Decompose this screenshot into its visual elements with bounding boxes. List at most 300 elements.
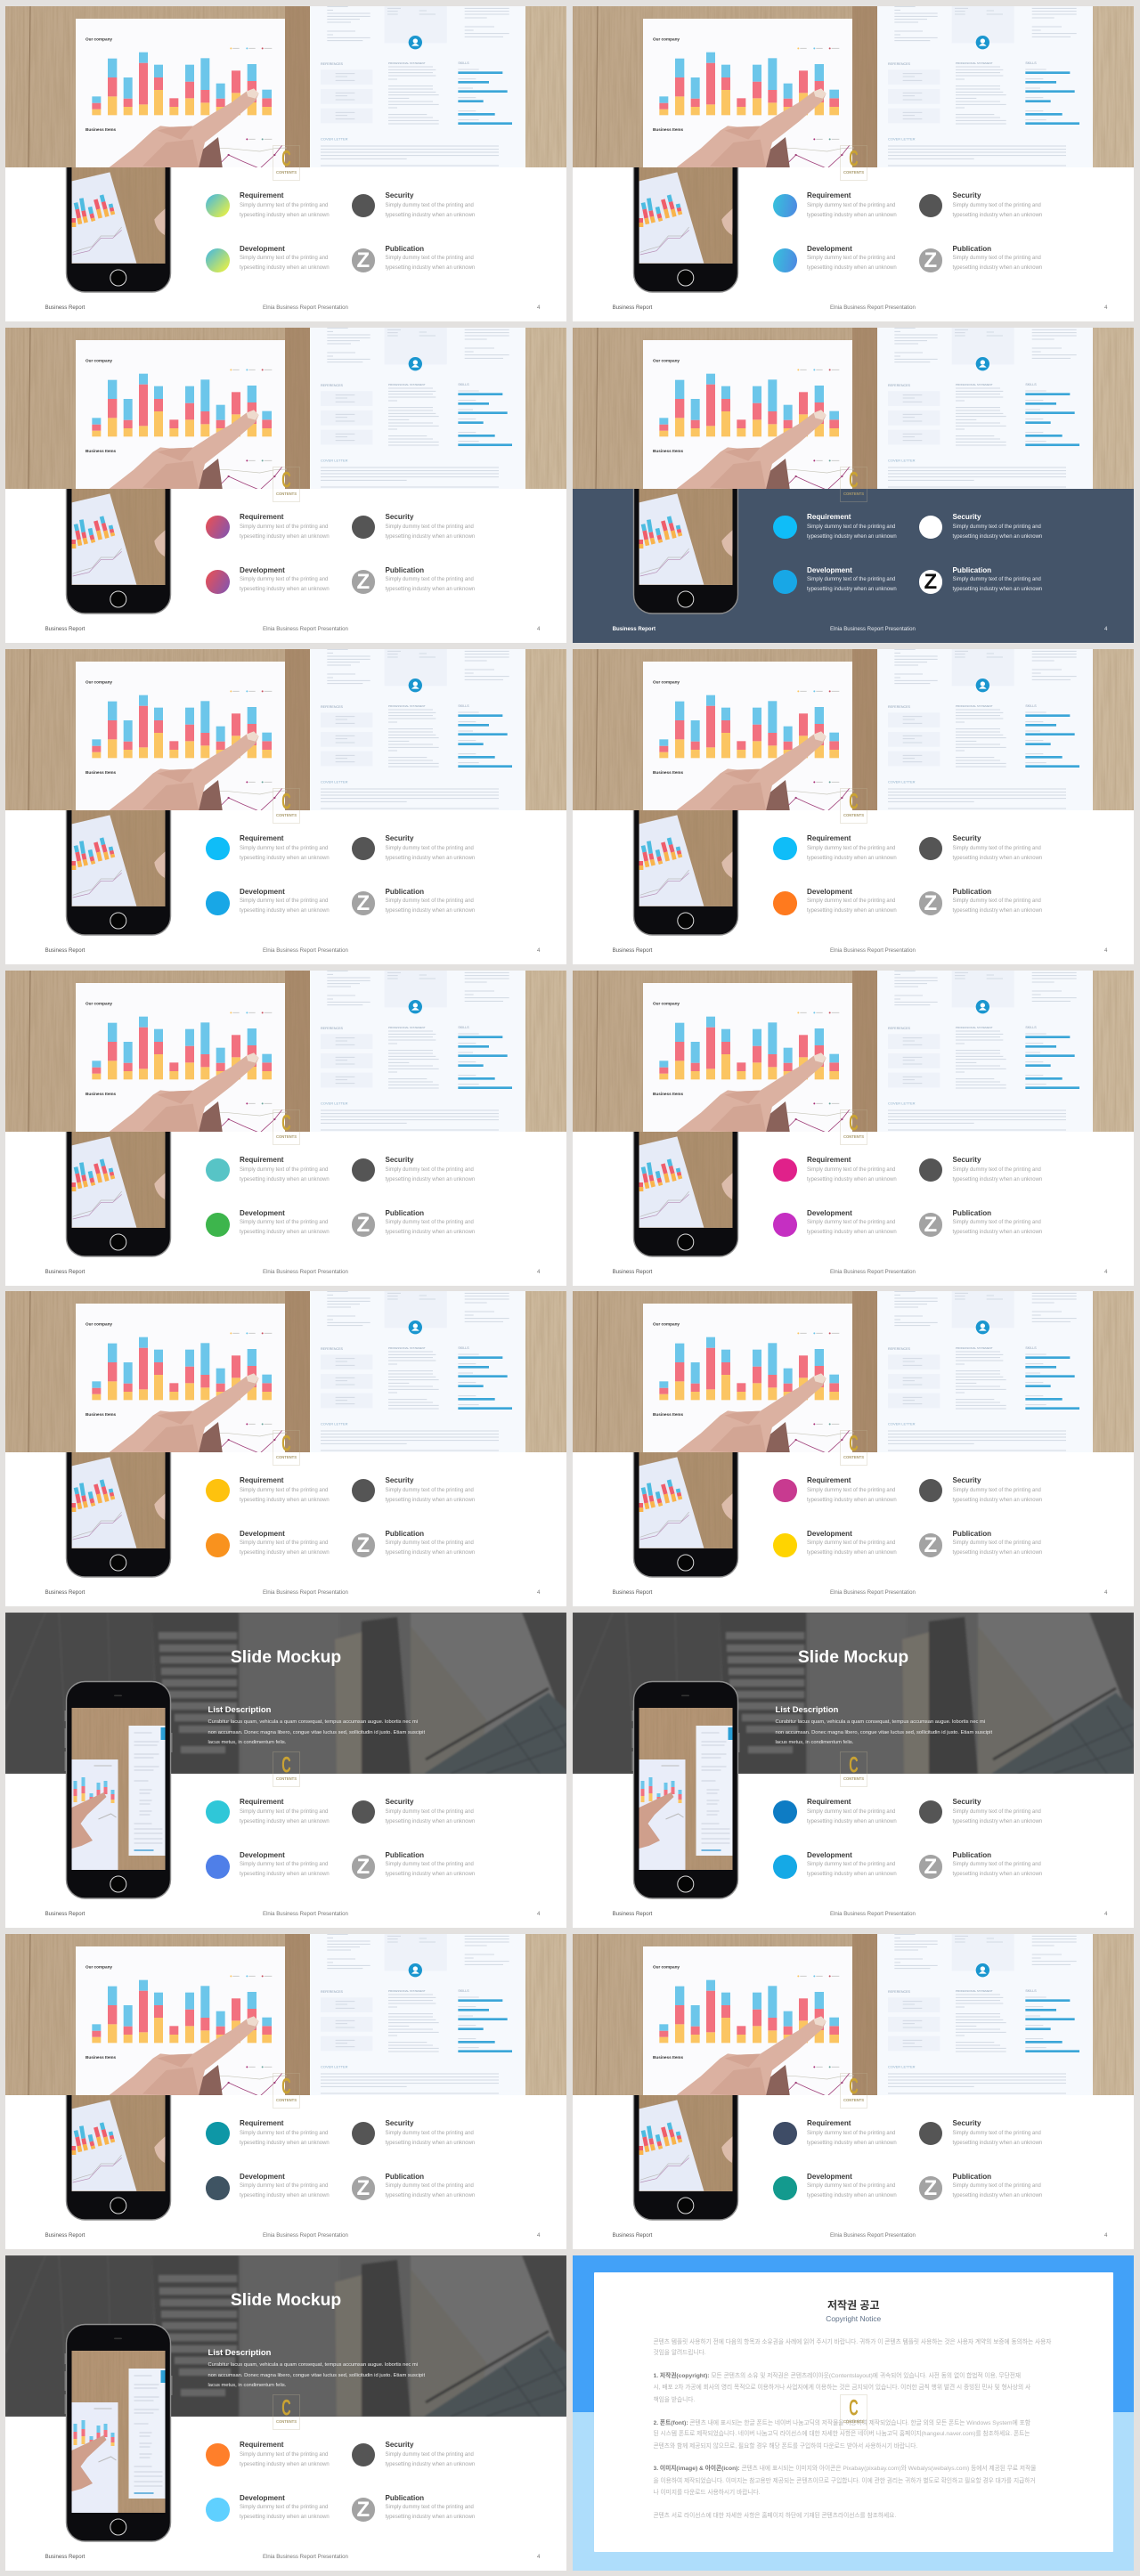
feature: security [919,1155,1071,1195]
footer: Elnia Business Report Presentation [263,626,348,632]
feature: security: typesetting industry when an unknown [953,1819,1042,1824]
text block: notice body: 3. 이미지(image) & 아이콘(icon): 콘텐츠 내에 표시되는 이미지와 아이콘은 Pixabay(pixabay.com)와 Webalys(webalys.com) 등에서 제공된 무료 저작물 [654,2466,1036,2472]
feature: publication: Z [356,2498,370,2522]
feature: security [351,1155,502,1195]
footer: Business Report [45,947,85,954]
logo watermark [840,467,867,502]
feature: development: Development [807,1530,852,1538]
feature: development: Development [807,566,852,574]
feature: requirement [773,512,924,552]
phone mockup [573,971,1134,1286]
footer: 4 [1104,626,1107,632]
feature: requirement [206,1475,357,1516]
slide 15: slide mockup, orange and sky [5,2255,566,2571]
feature: development: Simply dummy text of the printing and [807,2183,895,2189]
feature: publication: Z [924,570,937,594]
feature: requirement: typesetting industry when an unknown [240,1498,330,1503]
feature: requirement [206,191,330,218]
feature: development: Simply dummy text of the printing and [240,1540,328,1546]
description text [208,2361,425,2392]
feature: development: Simply dummy text of the printing and [240,1220,328,1225]
feature: requirement: typesetting industry when an unknown [807,856,897,861]
feature: security [919,1475,1071,1516]
band photo: charts and resume on wood [5,971,566,1132]
description text: lacus metus, in condimentum felis. [208,1740,286,1745]
subheading: list description: List Description [775,1704,838,1714]
feature: requirement: typesetting industry when an unknown [240,2141,330,2146]
slide 4: dark navy variant [573,328,1134,643]
logo watermark: CONTENTS [843,813,864,817]
feature: publication [919,2172,1071,2212]
feature: security [351,1797,502,1837]
footer: Business Report [45,1269,85,1275]
feature: security [352,513,475,540]
logo watermark: CONTENTS [276,492,297,496]
feature: security: Simply dummy text of the printing and [953,2130,1041,2135]
feature: requirement: typesetting industry when an unknown [807,1819,897,1824]
feature: requirement: Simply dummy text of the printing and [240,2130,328,2135]
band photo: city buildings [573,1613,1134,1774]
logo watermark: CONTENTS [843,1455,864,1459]
feature: publication: typesetting industry when an unknown [953,1230,1042,1235]
text block: notice body: 2. 폰트(font): 콘텐츠 내에 표시되는 한글 폰트는 네이버 나눔고딕의 저작물을 이용하여 제작되었습니다. 한글 외의 모든 폰트는 Windows System에 포함 [654,2420,1030,2426]
feature: requirement [206,833,357,874]
footer [573,1909,1134,1920]
logo watermark: CONTENTS [843,170,864,175]
feature: requirement: Simply dummy text of the printing and [807,1809,895,1815]
feature: publication [919,1850,1071,1890]
text block: notice body: 1. 저작권(copyright): 모든 콘텐츠의 소유 및 저작권은 콘텐츠레이아웃(Contentslayout)에 귀속되어 있습니다. 사전 동의 없이 합법적 이용, 무단전재 [654,2373,1021,2379]
band photo: charts and resume on wood [5,1934,566,2095]
feature: development: Simply dummy text of the printing and [807,577,895,582]
subheading: list description: List Description [208,1704,271,1714]
phone mockup [5,1934,566,2249]
feature: publication: Publication [953,566,991,574]
band photo: city buildings [5,1613,566,1774]
feature: publication: Simply dummy text of the printing and [385,2183,474,2189]
logo watermark: CONTENTS [843,2419,864,2424]
feature: development: Development [240,245,285,253]
feature: requirement: Requirement [807,1156,851,1164]
footer: Elnia Business Report Presentation [830,1911,916,1917]
footer: Business Report [613,947,652,954]
footer: 4 [537,2554,540,2560]
logo watermark [273,2394,300,2430]
feature: development [773,1208,924,1248]
feature: security: Security [953,191,981,199]
feature: security: typesetting industry when an unknown [385,534,475,540]
feature: requirement [773,1797,924,1837]
logo watermark: C [849,1110,859,1136]
logo watermark [840,1430,867,1466]
logo watermark: C [281,467,291,493]
logo watermark: C [281,1752,291,1778]
text block: notice body: 시, 배포 2차 가공에 회사의 영리 목적으로 이용하거나 사업자에게 이용하는 것은 금지되어 있습니다. 이러한 금칙 행위 발견 시 증빙된 민사 및 형사상의 사 [654,2385,1030,2391]
feature: development [206,1850,357,1890]
feature: requirement: Requirement [240,2441,283,2449]
footer: Elnia Business Report Presentation [830,947,916,954]
feature: development: Development [240,1851,285,1859]
logo watermark [840,788,867,824]
feature: development: Development [240,566,285,574]
feature: security: Security [953,834,981,842]
footer [573,1588,1134,1598]
feature: requirement: Requirement [807,1476,851,1484]
feature: development: typesetting industry when an unknown [240,1230,330,1235]
feature: publication: typesetting industry when an unknown [953,265,1042,271]
text block: notice body: 콘텐츠와 함께 제공되지 않으므로, 필요할 경우 해당 폰트를 구입하여 다운로드 받아서 사용하시기 바랍니다. [654,2443,917,2450]
feature: security: Security [385,2441,413,2449]
footer: Elnia Business Report Presentation [830,1269,916,1275]
logo watermark: CONTENTS [276,813,297,817]
feature: development: Simply dummy text of the printing and [807,1540,895,1546]
feature: security [351,833,502,874]
phone mockup [573,1291,1134,1606]
text block: notice body: 나 이미지를 다운로드 사용하시기 바랍니다. [654,2490,761,2496]
heading: slide mockup: Slide Mockup [231,1648,341,1667]
footer: 4 [1104,1911,1107,1917]
logo watermark: C [281,146,291,172]
logo watermark [273,2073,300,2109]
feature: security: Simply dummy text of the printing and [385,524,474,529]
feature: development: Development [807,245,852,253]
footer [45,305,540,311]
description text: non accumsan. Donec magna libero, congue vitae luctus sed, sollicitudin id justo. Etiam suscipit [208,1729,425,1735]
band photo: charts and resume on wood [5,1291,566,1452]
feature: publication: Publication [953,1209,991,1217]
feature: publication: Simply dummy text of the printing and [953,1540,1041,1546]
feature: publication [919,887,1071,927]
feature: security: Simply dummy text of the printing and [953,1487,1041,1492]
feature: security: Security [953,1156,981,1164]
phone mockup [573,649,1134,964]
logo watermark: C [281,2395,291,2421]
feature: publication: typesetting industry when an unknown [385,2193,475,2198]
slide 7: teal and green [5,971,566,1286]
feature: requirement: Requirement [807,513,851,521]
feature: publication: typesetting industry when an unknown [953,1872,1042,1877]
logo watermark: CONTENTS [843,492,864,496]
footer [5,2552,566,2563]
logo watermark [273,1430,300,1466]
feature: security: Simply dummy text of the printing and [385,2130,474,2135]
feature: development: Simply dummy text of the printing and [240,2505,328,2510]
band photo: charts and resume on wood [573,6,1134,167]
feature: publication [919,245,1042,272]
feature: security: typesetting industry when an unknown [385,1819,475,1824]
feature: security: typesetting industry when an unknown [953,2141,1042,2146]
feature: publication [351,1208,502,1248]
feature: publication: typesetting industry when an unknown [385,587,475,592]
feature: security [919,1797,1071,1837]
feature: requirement [206,2118,357,2158]
feature: requirement: Requirement [240,834,283,842]
feature: development: typesetting industry when an unknown [807,587,897,592]
feature: publication: Publication [385,2173,424,2181]
footer [573,1267,1134,1278]
feature: security [919,512,1071,552]
feature: publication: Simply dummy text of the printing and [385,2505,474,2510]
logo watermark: CONTENTS [843,1134,864,1139]
feature: requirement: typesetting industry when an unknown [807,2141,897,2146]
feature: publication: typesetting industry when an unknown [385,265,475,271]
feature: publication: Z [356,248,370,272]
logo watermark: CONTENTS [276,170,297,175]
feature: requirement: Simply dummy text of the printing and [807,1487,895,1492]
footer: Business Report [45,2232,85,2239]
feature: security [919,2118,1071,2158]
logo watermark: CONTENTS [843,2098,864,2102]
description text: non accumsan. Donec magna libero, congue vitae luctus sed, sollicitudin id justo. Etiam suscipit [775,1729,992,1735]
feature: security: typesetting industry when an unknown [385,2141,475,2146]
feature: publication [919,565,1071,605]
feature: development: typesetting industry when an unknown [807,1230,897,1235]
logo watermark [273,788,300,824]
text block: notice body: 콘텐츠 서로 라이선스에 대한 자세한 사항은 홈페이지 하단에 기재된 콘텐츠라이선스를 참조하세요. [654,2513,896,2519]
band photo: charts and resume on wood [573,1934,1134,2095]
feature: requirement: typesetting industry when an unknown [240,856,330,861]
logo watermark: C [281,789,291,815]
footer: Elnia Business Report Presentation [830,305,916,311]
feature: publication: Simply dummy text of the printing and [953,2183,1041,2189]
footer: Business Report [613,626,656,632]
feature: development: typesetting industry when an unknown [807,908,897,914]
feature: publication: Publication [385,888,424,896]
feature: security: Security [953,513,981,521]
feature: requirement: Requirement [240,1476,283,1484]
feature: security: Simply dummy text of the printing and [953,846,1041,851]
footer [5,1909,566,1920]
feature: publication: Z [924,248,937,272]
feature: development: typesetting industry when an unknown [240,2193,330,2198]
feature: development [206,2172,357,2212]
footer: 4 [1104,947,1107,954]
band photo: charts and resume on wood [573,328,1134,489]
logo watermark: CONTENTS [276,1776,297,1781]
feature: requirement: Requirement [240,1798,283,1806]
logo watermark: CONTENTS [276,1455,297,1459]
footer: Business Report [45,626,85,632]
feature: requirement: typesetting industry when an unknown [807,1498,897,1503]
footer: Elnia Business Report Presentation [830,2232,916,2239]
description text: Curabitur lacus quam, vehicula a quam consequat, tempus accumsan augue. lobortis nec mi [775,1719,985,1725]
feature: publication: typesetting industry when an unknown [953,2193,1042,2198]
phone mockup [5,1613,566,1928]
band photo: charts and resume on wood [5,649,566,810]
feature: security: Simply dummy text of the printing and [953,203,1041,208]
feature: development: Simply dummy text of the printing and [240,256,328,261]
slide 3: red-purple gradient [5,328,566,643]
feature: requirement: typesetting industry when an unknown [240,1819,330,1824]
feature: security: typesetting industry when an unknown [953,534,1042,540]
feature: development [206,566,330,594]
phone mockup [632,167,739,293]
phone mockup [5,1291,566,1606]
feature: security: Simply dummy text of the printing and [953,524,1041,529]
feature: security: Security [953,1476,981,1484]
feature: security [351,1475,502,1516]
footer: Business Report [613,305,652,311]
feature: requirement: typesetting industry when an unknown [240,534,330,540]
feature: development: typesetting industry when an unknown [240,1872,330,1877]
logo watermark: CONTENTS [276,1134,297,1139]
feature: security: typesetting industry when an unknown [385,1498,475,1503]
footer: Business Report [613,1269,652,1275]
slide 10: pink and yellow [573,1291,1134,1606]
feature: requirement: Simply dummy text of the printing and [240,1487,328,1492]
feature: development: Development [807,888,852,896]
heading: copyright title: 저작권 공고 [827,2299,880,2312]
feature: publication: Z [924,2176,937,2200]
feature: security: Security [385,2119,413,2127]
subheading: list description: List Description [208,2347,271,2357]
slide 5: cyan and blue [5,649,566,964]
logo watermark: C [849,789,859,815]
footer: Business Report [613,1589,652,1596]
slide 2: blue gradient [573,6,1134,321]
feature: development: Development [240,888,285,896]
feature: requirement: typesetting industry when an unknown [807,213,897,218]
logo watermark [840,145,867,181]
feature: publication: Z [356,891,370,915]
footer: 4 [537,305,540,311]
description text: Curabitur lacus quam, vehicula a quam consequat, tempus accumsan augue. lobortis nec mi [208,1719,418,1725]
feature: requirement: typesetting industry when an unknown [807,1177,897,1182]
feature: publication [352,566,475,594]
feature: security: typesetting industry when an unknown [385,2462,475,2467]
logo watermark: CONTENTS [843,1776,864,1781]
logo watermark: C [849,2395,859,2421]
feature: security [919,191,1042,218]
footer: Business Report [45,305,85,311]
heading: slide mockup: Slide Mockup [231,2291,341,2310]
feature: publication: Publication [385,1530,424,1538]
feature: publication [919,1529,1071,1569]
footer: 4 [1104,305,1107,311]
feature: development: Simply dummy text of the printing and [807,256,895,261]
feature: publication: Publication [385,2494,424,2502]
logo watermark: C [281,1110,291,1136]
feature: publication: typesetting industry when an unknown [385,908,475,914]
feature: security: Security [385,1476,413,1484]
feature: publication: Publication [953,888,991,896]
logo watermark: C [849,1431,859,1457]
logo watermark [840,2394,867,2430]
feature: security: typesetting industry when an unknown [385,1177,475,1182]
feature: security: typesetting industry when an unknown [953,1498,1042,1503]
feature: publication: Publication [953,245,991,253]
description text [208,1718,425,1749]
feature: security: Simply dummy text of the printing and [385,2452,474,2458]
feature: development [773,1529,924,1569]
logo watermark: C [281,1431,291,1457]
slide 1: blue-yellow gradient [5,6,566,321]
footer: Business Report [45,1589,85,1596]
feature: publication: Publication [385,245,424,253]
footer: Business Report [613,1911,652,1917]
description text: Curabitur lacus quam, vehicula a quam consequat, tempus accumsan augue. lobortis nec mi [208,2362,418,2368]
feature: publication [351,2172,502,2212]
feature: publication: Z [924,1213,937,1237]
footer: 4 [1104,2232,1107,2239]
logo watermark [840,2073,867,2109]
footer [5,946,566,956]
logo watermark: CONTENTS [276,2419,297,2424]
footer [5,2231,566,2241]
band photo: charts and resume on wood [573,649,1134,810]
footer: 4 [537,626,540,632]
footer: Elnia Business Report Presentation [830,626,916,632]
phone mockup [66,489,171,614]
feature: publication: typesetting industry when an unknown [953,1550,1042,1556]
feature: requirement: Requirement [240,1156,283,1164]
feature: development: typesetting industry when an unknown [807,1872,897,1877]
feature: publication: Simply dummy text of the printing and [385,1862,474,1867]
footer [613,305,1108,311]
feature: development: typesetting industry when an unknown [240,587,330,592]
logo watermark [840,1751,867,1787]
footer: Elnia Business Report Presentation [830,1589,916,1596]
logo watermark [273,1109,300,1145]
logo watermark: C [849,1752,859,1778]
feature: publication: typesetting industry when an unknown [953,908,1042,914]
logo watermark: C [849,2074,859,2100]
feature: publication [351,1850,502,1890]
feature: publication: typesetting industry when an unknown [953,587,1042,592]
feature: requirement: Simply dummy text of the printing and [240,846,328,851]
feature: security: Simply dummy text of the printing and [953,1166,1041,1172]
feature: requirement: Requirement [807,2119,851,2127]
feature: security: typesetting industry when an unknown [953,213,1042,218]
description text: lacus metus, in condimentum felis. [208,2383,286,2388]
feature: security: Security [385,834,413,842]
description text: non accumsan. Donec magna libero, congue vitae luctus sed, sollicitudin id justo. Etiam suscipit [208,2372,425,2377]
phone mockup [5,649,566,964]
feature: requirement: Requirement [240,2119,283,2127]
logo watermark: C [281,2074,291,2100]
feature: publication: Z [356,1533,370,1557]
feature: requirement: typesetting industry when an unknown [240,2462,330,2467]
feature: requirement: Simply dummy text of the printing and [240,524,328,529]
footer: 4 [1104,1269,1107,1275]
slide 14: navy and teal green [573,1934,1134,2249]
feature: publication: Simply dummy text of the printing and [385,577,474,582]
feature: security: typesetting industry when an unknown [953,856,1042,861]
feature: requirement [773,833,924,874]
feature: development: Development [807,1209,852,1217]
logo watermark [273,467,300,502]
heading: slide mockup: Slide Mockup [798,1648,908,1667]
slide 13: teal and slate [5,1934,566,2249]
feature: publication: Simply dummy text of the printing and [953,256,1041,261]
feature: publication: Publication [953,1851,991,1859]
feature: publication: Z [356,570,370,594]
feature: publication [351,1529,502,1569]
slide 12: slide mockup, blues [573,1613,1134,1928]
band photo: charts and resume on wood [573,971,1134,1132]
feature: publication: Simply dummy text of the printing and [385,1540,474,1546]
feature: publication: Z [924,1855,937,1879]
feature: development [773,887,924,927]
feature: requirement: Requirement [807,191,851,199]
feature: development: typesetting industry when an unknown [807,1550,897,1556]
feature: requirement: Requirement [240,513,283,521]
footer [573,946,1134,956]
logo watermark [840,1109,867,1145]
footer: Elnia Business Report Presentation [263,1269,348,1275]
feature: development: Simply dummy text of the printing and [807,1220,895,1225]
feature: publication: Z [924,891,937,915]
